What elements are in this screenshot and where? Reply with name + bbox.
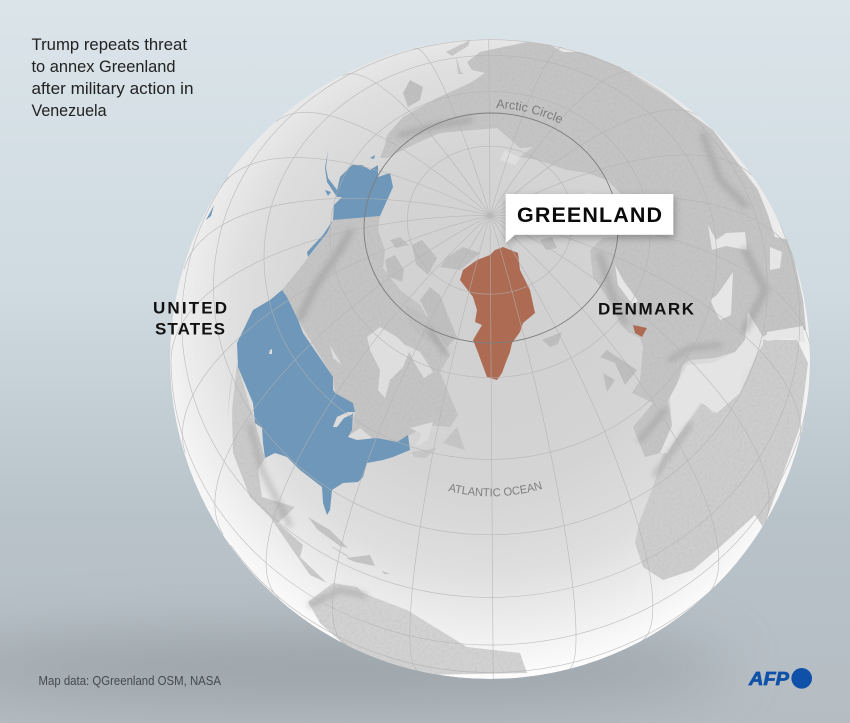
globe shadow bbox=[0, 632, 730, 704]
Ireland bbox=[603, 373, 615, 392]
land masses bbox=[227, 40, 808, 675]
label: United States: UNITED bbox=[153, 298, 227, 318]
label: United States: STATES bbox=[155, 320, 225, 338]
Kamchatka bbox=[403, 80, 423, 107]
Iceland bbox=[542, 332, 562, 347]
AFP logo bbox=[748, 668, 812, 689]
callout: Greenland: GREENLAND bbox=[517, 203, 662, 227]
callout: Greenland bbox=[506, 194, 673, 243]
title text bbox=[32, 36, 194, 120]
Caribbean islands bbox=[308, 517, 390, 574]
Eurasia bbox=[380, 42, 806, 457]
South America bbox=[308, 583, 527, 675]
Arctic coast white bits bbox=[500, 150, 592, 194]
Svalbard bbox=[540, 237, 557, 250]
Japan bbox=[446, 40, 470, 74]
title text: Venezuela bbox=[32, 102, 107, 120]
Aleutian islands bbox=[206, 155, 375, 220]
United States mainland bbox=[206, 150, 410, 515]
globe bbox=[169, 37, 813, 681]
Britain bbox=[600, 350, 637, 385]
Alaska bbox=[307, 150, 393, 257]
label: Denmark: DENMARK bbox=[598, 300, 695, 318]
title text: after military action in bbox=[32, 80, 194, 98]
source credit: Map data: QGreenland OSM, NASA bbox=[38, 674, 222, 688]
Africa bbox=[635, 340, 808, 580]
label: United States bbox=[153, 298, 227, 338]
Newfoundland bbox=[443, 427, 465, 450]
Arctic Circle label: Arctic Circle bbox=[496, 100, 562, 123]
Hudson Strait bbox=[406, 345, 433, 378]
Mexico and Central America bbox=[232, 363, 327, 583]
Mediterranean bbox=[660, 312, 763, 453]
Arctic Circle line bbox=[364, 113, 618, 343]
relief shading bbox=[250, 120, 765, 605]
title text: to annex Greenland bbox=[32, 58, 176, 76]
Canadian and Great Lakes bbox=[330, 345, 433, 447]
Hudson Bay bbox=[367, 327, 410, 398]
AFP logo: AFP bbox=[748, 669, 790, 689]
Nova Scotia bbox=[412, 448, 437, 458]
Great Lake and salt lake bbox=[269, 349, 353, 427]
Seas on Eurasia bbox=[615, 225, 805, 343]
graticule bbox=[169, 37, 813, 681]
Denmark territory bbox=[633, 325, 647, 337]
Baja California bbox=[228, 370, 234, 414]
Atlantic Ocean label: ATLANTIC OCEAN bbox=[448, 481, 542, 496]
Canada bbox=[282, 216, 458, 442]
Arctic islands bbox=[385, 237, 480, 347]
Greenland territory bbox=[460, 247, 535, 380]
title text: Trump repeats threat bbox=[32, 36, 187, 54]
